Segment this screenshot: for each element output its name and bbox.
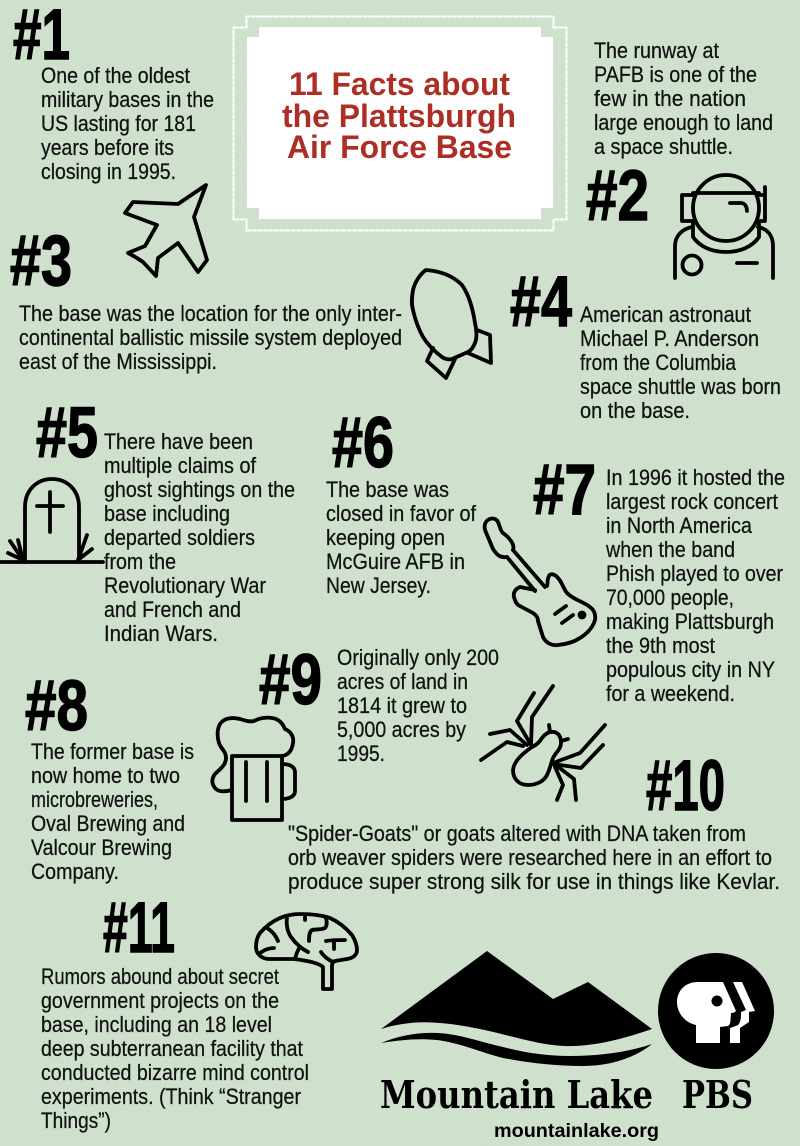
fact 10	[288, 747, 780, 894]
fact 7 text: populous city in NY	[606, 657, 775, 682]
fact 9 text: Originally only 200	[337, 645, 499, 670]
icon: spider	[481, 686, 605, 800]
fact 7 text: making Plattsburgh	[606, 609, 774, 634]
PBS circle logo	[658, 953, 774, 1069]
number 9: #9	[259, 641, 322, 720]
title heading: Air Force Base	[287, 129, 512, 165]
fact 4 text: on the base.	[580, 398, 690, 423]
number 10: #10	[646, 747, 725, 826]
fact 6 text: McGuire AFB in	[326, 549, 465, 574]
icon: missile	[412, 270, 491, 378]
fact 2 text: The runway at	[594, 38, 719, 63]
fact 4 text: space shuttle was born	[580, 374, 781, 399]
fact 3 text	[19, 301, 402, 374]
fact 7 text: largest rock concert	[606, 489, 778, 514]
icon: electric guitar	[485, 518, 595, 645]
fact 6 text: keeping open	[326, 525, 445, 550]
fact 5 text: Indian Wars.	[104, 621, 218, 646]
fact 2 text: few in the nation	[594, 86, 746, 111]
fact 8 text: Company.	[31, 859, 119, 884]
fact 9 text	[337, 645, 499, 766]
fact 2 text: PAFB is one of the	[594, 62, 757, 87]
fact 6 text	[326, 477, 477, 598]
PBS wordmark: PBS	[682, 1072, 753, 1117]
fact 9 text: 1814 it grew to	[337, 693, 467, 718]
fact 11 text: experiments. (Think “Stranger	[41, 1084, 301, 1109]
fact 3 text: continental ballistic missile system deployed	[19, 325, 402, 350]
fact 10 text	[288, 821, 780, 894]
fact 8 text: microbreweries,	[31, 787, 158, 812]
fact 1 text: military bases in the	[41, 87, 214, 112]
fact 8 text	[31, 739, 194, 884]
title heading: the Plattsburgh	[282, 98, 516, 134]
fact 3 text: The base was the location for the only inter-	[19, 301, 402, 326]
icon: brain	[256, 914, 357, 989]
fact 6 text: closed in favor of	[326, 501, 477, 526]
fact 8 text: Valcour Brewing	[31, 835, 172, 860]
fact 7 text	[605, 465, 785, 706]
number 5: #5	[36, 394, 98, 473]
fact 5 text: and French and	[104, 597, 241, 622]
fact 8 text: now home to two	[31, 763, 180, 788]
fact 1 text: One of the oldest	[41, 63, 190, 88]
fact 10 text: produce super strong silk for use in things like Kevlar.	[288, 869, 780, 894]
fact 4 text: Michael P. Anderson	[580, 326, 759, 351]
fact 5 text: from the	[104, 549, 176, 574]
fact 11 text: Things”)	[41, 1108, 111, 1133]
fact 5 text: departed soldiers	[104, 525, 255, 550]
number 8: #8	[25, 667, 88, 746]
number 3: #3	[10, 222, 72, 301]
fact 2 text: a space shuttle.	[594, 134, 733, 159]
fact 11 text: Rumors abound about secret	[41, 964, 279, 989]
number 6: #6	[332, 404, 394, 483]
fact 11 text	[41, 964, 309, 1133]
fact 7 text: the 9th most	[606, 633, 715, 658]
fact 10 text: "Spider-Goats" or goats altered with DNA taken from	[288, 821, 746, 846]
fact 7 text: for a weekend.	[606, 681, 735, 706]
fact 11 text: deep subterranean facility that	[41, 1036, 303, 1061]
number 7: #7	[533, 451, 596, 530]
fact 5 text	[104, 429, 295, 646]
fact 11 text: base, including an 18 level	[41, 1012, 272, 1037]
fact 9	[259, 641, 499, 766]
fact 7 text: In 1996 it hosted the	[606, 465, 785, 490]
fact 6 text: New Jersey.	[326, 573, 431, 598]
fact 1 text: US lasting for 181	[41, 111, 196, 136]
fact 8 text: The former base is	[31, 739, 194, 764]
fact 5 text: base including	[104, 501, 230, 526]
fact 7 text: Phish played to over	[606, 561, 783, 586]
fact 5 text: multiple claims of	[104, 453, 257, 478]
number 2: #2	[586, 157, 649, 236]
fact 11	[41, 889, 309, 1133]
fact 3	[10, 222, 402, 374]
fact 8 text: Oval Brewing and	[31, 811, 185, 836]
fact 2 text: large enough to land	[594, 110, 773, 135]
fact 4 text	[580, 302, 781, 423]
fact 9 text: acres of land in	[337, 669, 468, 694]
icon: jet plane	[125, 185, 207, 276]
fact 8	[25, 667, 194, 884]
number 4: #4	[510, 263, 572, 342]
fact 7 text: when the band	[605, 537, 735, 562]
title heading	[282, 66, 516, 165]
fact 7 text: 70,000 people,	[606, 585, 734, 610]
fact 3 text: east of the Mississippi.	[19, 349, 217, 374]
number 11: #11	[103, 889, 175, 968]
fact 11 text: conducted bizarre mind control	[41, 1060, 309, 1085]
fact 9 text: 5,000 acres by	[337, 717, 466, 742]
icon: astronaut	[675, 175, 773, 278]
fact 6	[326, 404, 477, 598]
website: mountainlake.org	[494, 1121, 659, 1142]
fact 5 text: ghost sightings on the	[104, 477, 295, 502]
fact 4 text: American astronaut	[580, 302, 751, 327]
fact 7 text: in North America	[606, 513, 753, 538]
fact 2 text	[594, 38, 773, 159]
fact 6 text: The base was	[326, 477, 449, 502]
icon: gravestone	[1, 479, 103, 562]
title heading: 11 Facts about	[289, 66, 510, 102]
icon: beer mug	[212, 718, 295, 820]
fact 4	[510, 263, 781, 423]
fact 5	[36, 394, 295, 646]
fact 5 text: There have been	[104, 429, 253, 454]
fact 1 text: closing in 1995.	[41, 159, 176, 184]
fact 1 text	[41, 63, 214, 184]
mountain logo mark	[381, 951, 652, 1066]
fact 1 text: years before its	[41, 135, 174, 160]
fact 2	[586, 38, 773, 236]
Mountain Lake wordmark: Mountain Lake	[380, 1072, 653, 1117]
fact 1	[13, 0, 214, 184]
fact 4 text: from the Columbia	[580, 350, 737, 375]
logo: Mountain Lake PBS	[380, 951, 774, 1142]
fact 7	[533, 451, 785, 706]
fact 5 text: Revolutionary War	[104, 573, 266, 598]
title box	[234, 16, 566, 230]
fact 11 text: government projects on the	[41, 988, 279, 1013]
fact 9 text: 1995.	[337, 741, 385, 766]
